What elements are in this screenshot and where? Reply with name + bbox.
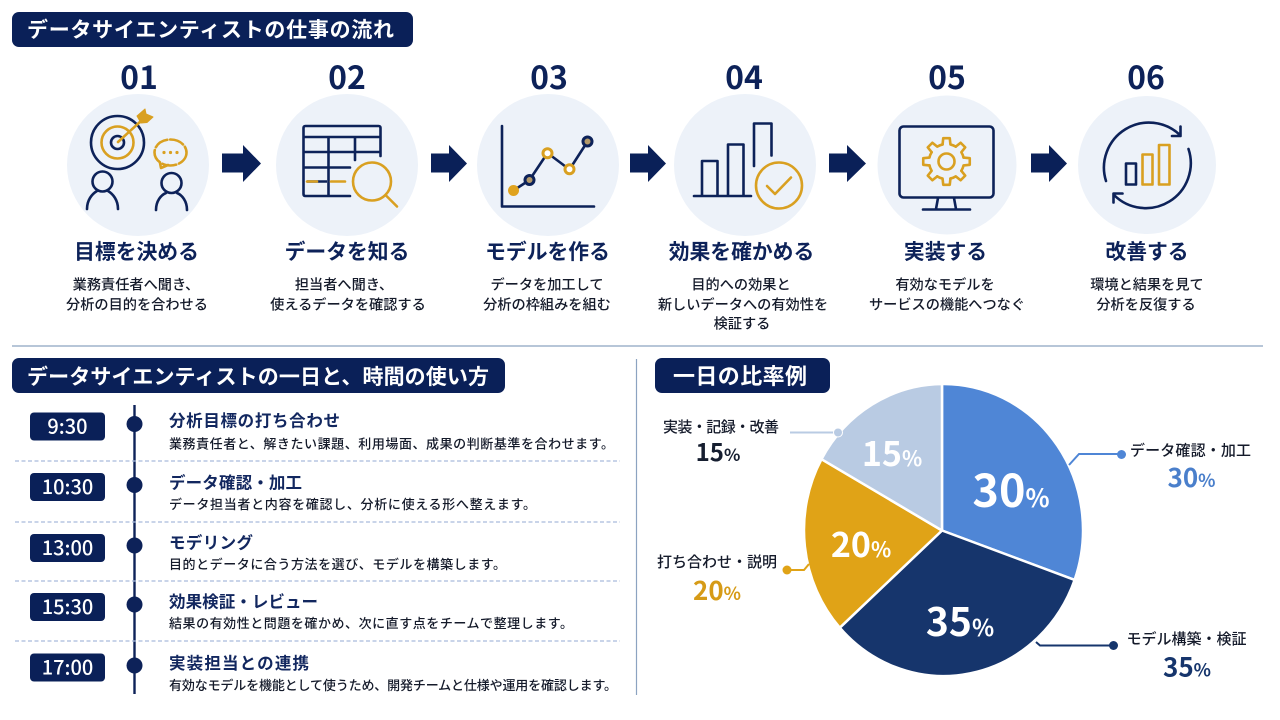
step 05: 05 — [928, 53, 966, 99]
step 03: 03 — [530, 53, 568, 99]
timeline entry 10:30: 10:30 — [42, 471, 93, 500]
timeline entry 13:00: 13:00 — [42, 532, 93, 561]
step 03: モデルを作る — [485, 235, 610, 265]
step 03: データを加工して — [490, 274, 604, 294]
step 06: 改善する — [1105, 235, 1189, 265]
callout: meeting 20%: 20% — [693, 571, 741, 608]
step 02 — [270, 53, 426, 314]
slice: meeting 20% — [804, 459, 942, 628]
step 02: 使えるデータを確認する — [270, 294, 426, 314]
pie value labels — [831, 427, 1050, 648]
icon: monitor and gear — [900, 126, 994, 210]
icon: line chart — [502, 126, 594, 206]
callout: data 30% — [1069, 440, 1251, 495]
icon: target and people talking — [87, 109, 187, 210]
timeline entry 13:00: モデリング — [169, 530, 254, 554]
step 06: 06 — [1127, 53, 1165, 99]
step 04: 目的への効果と — [691, 274, 791, 294]
arrow 5 — [1031, 145, 1067, 182]
callout: data 30%: 30% — [1167, 458, 1216, 495]
heading: a day: データサイエンティストの一日と、時間の使い方 — [27, 361, 489, 391]
step 05: サービスの機能へつなぐ — [869, 294, 1025, 314]
step 03: 分析の枠組みを組む — [483, 294, 611, 314]
pie value labels: 15% — [862, 427, 922, 476]
step 03 — [477, 53, 619, 314]
timeline entry 10:30 — [30, 470, 536, 513]
slice: implement 15% — [822, 384, 942, 530]
step 06: 分析を反復する — [1096, 294, 1196, 314]
pie chart — [804, 384, 1083, 676]
timeline entry 10:30: データ担当者と内容を確認し、分析に使える形へ整えます。 — [169, 494, 536, 513]
arrow 1 — [222, 145, 261, 182]
timeline entry 15:30: 効果検証・レビュー — [169, 588, 318, 612]
callout: meeting 20%: 打ち合わせ・説明 — [657, 551, 777, 572]
timeline entry 15:30: 15:30 — [42, 591, 93, 620]
step 02: データを知る — [285, 235, 409, 265]
timeline entry 17:00 — [30, 650, 617, 694]
timeline entry 13:00 — [30, 530, 506, 573]
callout: data 30%: データ確認・加工 — [1130, 440, 1251, 460]
step 01: 分析の目的を合わせる — [66, 294, 208, 314]
step 02: 担当者へ聞き、 — [295, 274, 393, 294]
timeline entry 9:30: 業務責任者と、解きたい課題、利用場面、成果の判断基準を合わせます。 — [169, 434, 614, 452]
step 02: 02 — [328, 53, 366, 99]
pie value labels: 20% — [831, 518, 891, 567]
arrow 4 — [829, 145, 866, 182]
step 01: 業務責任者へ聞き、 — [73, 274, 199, 294]
timeline entry 15:30 — [30, 588, 573, 632]
heading: ratio: 一日の比率例 — [673, 359, 807, 391]
slice: model 35% — [840, 530, 1075, 676]
step 05: 有効なモデルを — [895, 274, 995, 294]
step 01: 01 — [120, 53, 158, 99]
callout: implement 15%: 15% — [696, 433, 740, 468]
arrow 2 — [431, 145, 467, 182]
callout: model 35%: 35% — [1163, 648, 1211, 684]
step 04: 新しいデータへの有効性を — [658, 294, 828, 314]
step 01: 目標を決める — [74, 235, 199, 265]
icon: table and magnifier — [304, 126, 397, 206]
timeline entry 13:00: 目的とデータに合う方法を選び、モデルを構築します。 — [169, 554, 506, 573]
step 06 — [1078, 53, 1216, 314]
step 04: 検証する — [714, 314, 770, 334]
step 05: 実装する — [904, 235, 987, 265]
icon: improvement cycle and bars — [1104, 123, 1191, 208]
step 04: 04 — [725, 53, 763, 99]
callout: implement 15% — [663, 416, 842, 468]
timeline — [15, 405, 620, 694]
callout: model 35% — [1036, 628, 1246, 684]
step 05 — [869, 53, 1025, 314]
step 04: 効果を確かめる — [669, 235, 814, 265]
step 04 — [658, 53, 828, 334]
callout: model 35%: モデル構築・検証 — [1126, 628, 1246, 649]
timeline entry 9:30 — [30, 408, 614, 452]
timeline entry 17:00: 有効なモデルを機能として使うため、開発チームと仕様や運用を確認します。 — [169, 675, 617, 694]
pie value labels: 35% — [926, 592, 994, 648]
timeline entry 9:30: 9:30 — [47, 410, 88, 440]
timeline entry 17:00: 17:00 — [42, 652, 93, 680]
callout: meeting 20% — [657, 551, 809, 608]
icon: bars and check mark — [694, 124, 802, 208]
timeline entry 15:30: 結果の有効性と問題を確かめ、次に直す点をチームで整理します。 — [169, 613, 573, 632]
timeline entry 9:30: 分析目標の打ち合わせ — [169, 408, 340, 432]
slice: data 30% — [942, 384, 1083, 580]
timeline entry 10:30: データ確認・加工 — [169, 470, 302, 494]
timeline entry 17:00: 実装担当との連携 — [169, 650, 309, 674]
callout: implement 15%: 実装・記録・改善 — [663, 416, 779, 437]
title: workflow heading: データサイエンティストの仕事の流れ — [27, 14, 394, 44]
arrow 3 — [630, 145, 666, 182]
step 06: 環境と結果を見て — [1090, 274, 1204, 294]
step 01 — [66, 53, 209, 314]
pie value labels: 30% — [972, 455, 1050, 520]
